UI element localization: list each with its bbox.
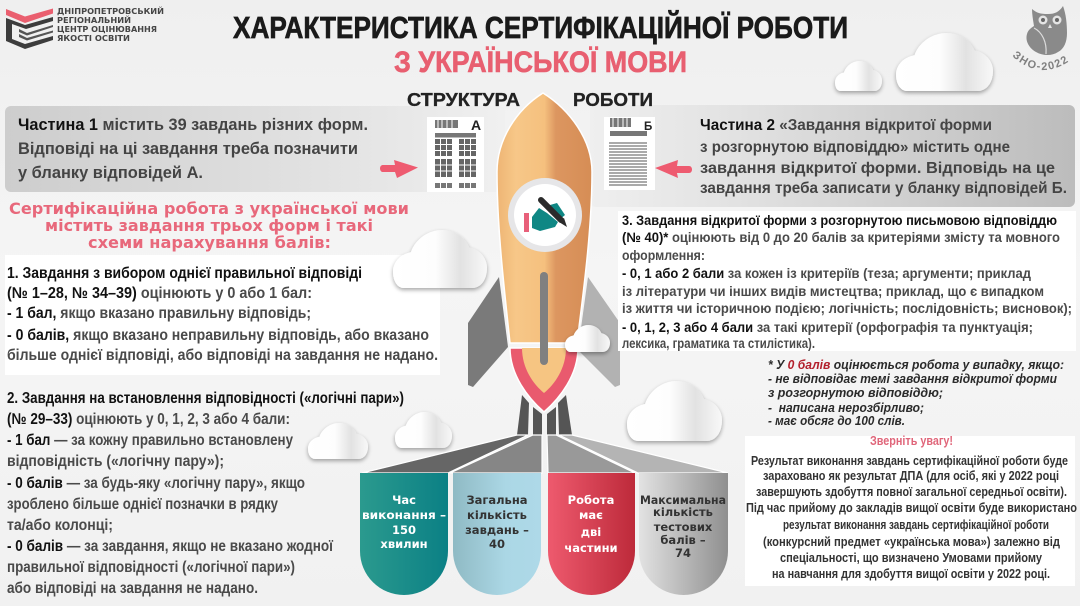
icon: answer sheet A: А [471, 117, 481, 133]
heading: three forms of tasks: схеми нарахування балів: [88, 233, 331, 252]
title: ХАРАКТЕРИСТИКА СЕРТИФІКАЦІЙНОЇ РОБОТИ [233, 9, 848, 45]
capsule: number of tasks: 40 [489, 537, 505, 551]
text block: task type 2: та/або колонці; [7, 517, 113, 534]
text block: task type 3: лексика, граматика та стилістика). [622, 336, 815, 351]
capsule: two parts: Робота [568, 493, 614, 507]
capsule: number of tasks: Загальна [466, 493, 528, 507]
text block: task type 1: більше однієї відповіді, або відповіді на завдання не надано. [7, 347, 438, 364]
heading: three forms of tasks: Сертифікаційна робота з української мови [9, 199, 409, 218]
capsule: max points: Максимальна [640, 493, 726, 507]
logo: regional centre: ДНІПРОПЕТРОВСЬКИЙ [57, 7, 164, 16]
text block: task type 2: - 0 балів — за завдання, якщо не вказано жодної [7, 538, 334, 555]
capsule: number of tasks: завдань – [465, 523, 529, 537]
capsule: max points: 74 [675, 546, 691, 560]
text block: task type 2: (№ 29–33) оцінюють у 0, 1, 2, 3 або 4 бали: [7, 411, 290, 428]
centre rod [540, 272, 548, 365]
text block: task type 2: правильної відповідності («логічної пари») [7, 559, 295, 576]
panel: part 1 band [5, 106, 505, 192]
text block: task type 3: із літератури чи інших видів мистецтва; приклад, що є випадком [622, 284, 1044, 299]
capsule: two parts: дві [581, 525, 601, 539]
heading: structure of work: РОБОТИ [573, 90, 653, 110]
heading: structure of work: СТРУКТУРА [407, 90, 520, 110]
text block: task type 3 [618, 211, 1076, 351]
callout: attention [745, 434, 1077, 586]
panel: part 2 band: завдання треба записати у бланку відповідей Б. [700, 180, 1067, 197]
logo: regional centre: ЦЕНТР ОЦІНЮВАННЯ [57, 25, 157, 34]
capsule: max points: кількість [653, 505, 713, 519]
note: zero points conditions [768, 357, 1064, 428]
panel: part 1 band: у бланку відповідей А. [18, 163, 203, 182]
cloud on rocket fin [565, 325, 610, 352]
heading: three forms of tasks: містить завдання трьох форм і такі [45, 216, 373, 235]
clouds left of rocket [308, 230, 722, 459]
capsule: two parts [548, 473, 635, 595]
text block: task type 3: із життя чи історичною подією; логічність; послідовність; висновок); [622, 301, 1072, 316]
panel: part 2 band [590, 105, 1075, 207]
emblem: writing hand [508, 178, 582, 252]
text block: task type 3: (№ 40)* оцінюють від 0 до 20 балів за критеріями змісту та мовного [622, 230, 1060, 245]
capsule: two parts: частини [564, 541, 618, 555]
title: З УКРАЇНСЬКОЇ МОВИ [394, 46, 687, 79]
capsule: duration [360, 473, 448, 595]
arrow: to sheet A [380, 160, 418, 178]
panel: part 2 band: з розгорнутою відповіддю» містить одне [700, 139, 1010, 156]
heading: three forms of tasks [9, 199, 409, 252]
capsule: max points: балів – [660, 533, 706, 547]
text block: task type 2 [7, 390, 404, 597]
text block: task type 1: (№ 1–28, № 34–39) оцінюють у 0 або 1 бал: [7, 285, 312, 302]
text block: task type 1: - 0 балів, якщо вказано неправильну відповідь, або вказано [7, 327, 429, 344]
rocket [468, 93, 620, 435]
capsule: max points: тестових [654, 520, 713, 534]
title [233, 9, 848, 79]
text block: task type 2: зроблено більше однієї позначки в рядку [7, 496, 278, 513]
engine legs [517, 395, 572, 435]
text block: task type 1: - 1 бал, якщо вказано правильну відповідь; [7, 305, 311, 322]
icon: answer sheet B [604, 117, 655, 190]
icon: answer sheet A [427, 117, 484, 192]
capsule: duration: 150 [392, 523, 416, 537]
capsule: number of tasks: кількість [467, 508, 527, 522]
capsule: number of tasks [453, 473, 541, 595]
text block: task type 2: - 0 балів — за будь-яку «логічну пару», якщо [7, 475, 305, 492]
text block: task type 2: 2. Завдання на встановлення відповідності («логічні пари») [7, 390, 404, 407]
left fin [468, 277, 508, 387]
icon: answer sheet B: Б [644, 121, 652, 133]
panel: part 2 band: Частина 2 «Завдання відкритої форми [700, 117, 992, 134]
text block: task type 2: відповідність («логічну пару»); [7, 453, 224, 470]
text block: task type 1 [5, 255, 440, 375]
capsule: duration: Час [392, 493, 416, 507]
capsule: duration: виконання – [362, 508, 446, 522]
arrow: to sheet B [655, 160, 692, 178]
panel: part 1 band: Відповіді на ці завдання треба позначити [18, 139, 358, 158]
icon: owl logo ZNO-2022: ЗНО-2022 [1013, 52, 1068, 70]
heading: structure of work [407, 90, 653, 110]
text block: task type 1: 1. Завдання з вибором однієї правильної відповіді [7, 265, 362, 282]
logo: regional centre [6, 7, 164, 49]
right fin [578, 277, 620, 387]
note: zero points conditions: * У 0 балів оцінюється робота у випадку, якщо: [768, 357, 1064, 372]
note: zero points conditions: - не відповідає темі завдання відкритої форми [768, 371, 1057, 386]
capsule: duration: хвилин [380, 537, 428, 551]
callout: attention: спеціальності, що визначено Умовами прийому [780, 551, 1042, 565]
icon: owl logo ZNO-2022 [1013, 6, 1068, 70]
text block: task type 3: 3. Завдання відкритої форми з розгорнутою письмовою відповіддю [622, 213, 1057, 228]
panel: part 1 band: Частина 1 містить 39 завдань різних форм. [18, 115, 368, 134]
logo: regional centre: РЕГІОНАЛЬНИЙ [57, 16, 131, 25]
note: zero points conditions: - має обсяг до 100 слів. [768, 413, 905, 428]
text block: task type 3: оформлення: [622, 248, 705, 263]
clouds top right [835, 33, 993, 91]
rocket body [497, 93, 592, 343]
panel: part 2 band: завдання відкритої форми. Відповідь на це [700, 160, 1055, 177]
note: zero points conditions: - написана нерозбірливо; [768, 400, 924, 415]
text block: task type 3: - 0, 1 або 2 бали за кожен із критеріїв (теза; аргументи; приклад [622, 266, 1031, 281]
capsule: two parts: має [579, 508, 603, 522]
connectors: funnels to capsules [362, 435, 728, 473]
note: zero points conditions: з розгорнутою відповіддю; [768, 385, 943, 400]
text block: task type 2: - 1 бал — за кожну правильно встановлену [7, 432, 293, 449]
text block: task type 3: - 0, 1, 2, 3 або 4 бали за такі критерії (орфографія та пунктуація; [622, 320, 1033, 335]
callout: attention: Зверніть увагу! [870, 434, 953, 448]
logo: regional centre: ЯКОСТІ ОСВІТИ [57, 34, 130, 43]
text block: task type 2: або відповіді на завдання не надано. [7, 580, 258, 597]
nozzle shield [510, 348, 578, 412]
capsule: max points [639, 473, 728, 595]
